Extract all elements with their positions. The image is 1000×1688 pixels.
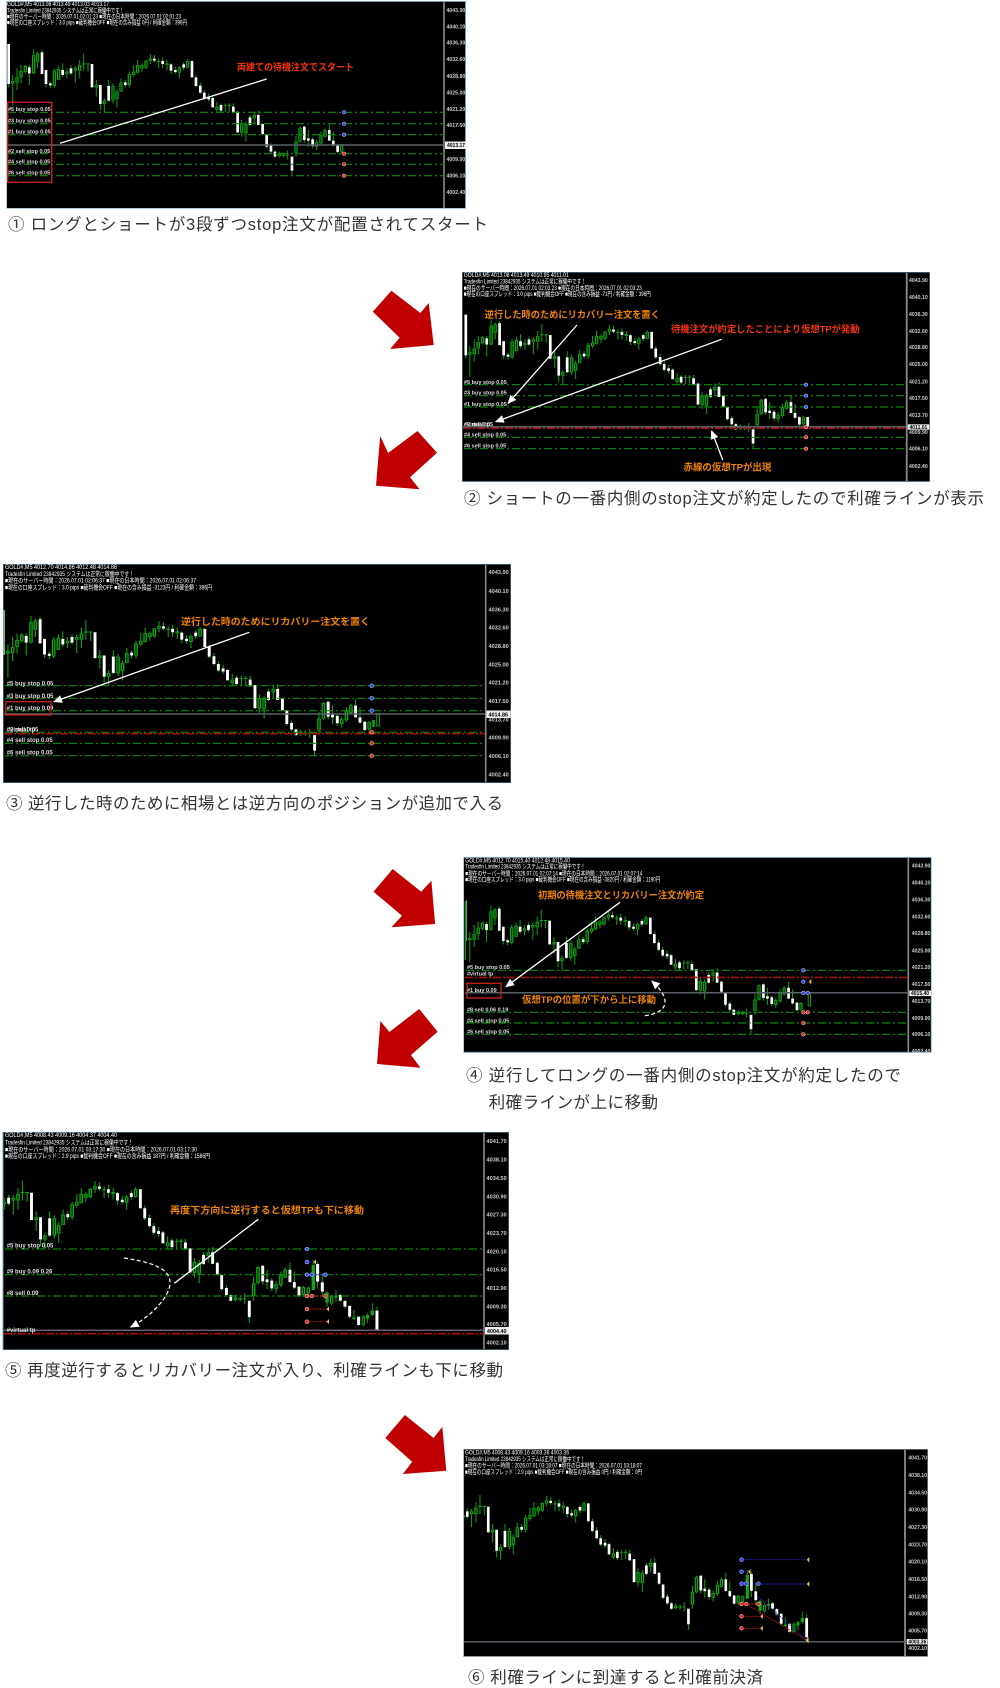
price axis labels (486, 1139, 507, 1347)
price axis labels: 4027.30 (486, 1213, 507, 1219)
arrow: down-left 2 (377, 1009, 438, 1068)
left edge candle (464, 901, 466, 960)
header readout: ■現在の口座スプレッド：3.0 pips ■裁判機会OFF ■現在の含み損益 -3123円 / 利確金額：396円 (5, 582, 212, 592)
price axis line (904, 1450, 906, 1656)
caption 4: ④ 逆行してロングの一番内側のstop注文が約定したので (466, 1066, 901, 1085)
price axis labels: 4017.50 (446, 123, 465, 129)
order labels: #1 buy stop 0.05 (8, 130, 51, 136)
header readout: ■現在の口座スプレッド：2.9 pips ■裁判機会OFF ■現在の含み損益 0円 / 利確金額：0円 (465, 1467, 642, 1476)
panel: chart 6 take profit reached (463, 1449, 928, 1657)
white arrows (496, 325, 723, 460)
price axis labels: 4023.70 (486, 1231, 507, 1237)
header readout (5, 564, 212, 592)
candlesticks (0, 1169, 377, 1331)
price axis labels: 4040.10 (488, 589, 509, 595)
price axis line (485, 565, 487, 782)
price axis labels: 4025.00 (488, 662, 509, 668)
header readout: GOLD#,M5 4008.43 4009.16 4003.36 4003.36 (465, 1450, 569, 1456)
price axis labels: 4038.10 (908, 1473, 927, 1479)
current price tag: 4011.01 (910, 425, 928, 431)
current price tag (445, 142, 466, 149)
header readout: Tradesfin Limited 23842935 システムは正常に稼働中です！ (7, 6, 124, 14)
order lines (4, 686, 485, 756)
price axis labels: 4012.90 (486, 1286, 507, 1292)
header readout: GOLD#,M5 4013.08 4013.49 4010.95 4011.01 (464, 272, 569, 279)
price axis labels: 4028.80 (446, 74, 465, 80)
price axis labels: 4032.60 (446, 57, 465, 63)
price axis labels: 4012.90 (908, 1594, 927, 1600)
chart background (6, 2, 466, 208)
price axis labels: 4032.60 (909, 329, 928, 335)
caption 4 (466, 1066, 901, 1112)
order labels (7, 682, 54, 756)
current price line (464, 1641, 905, 1643)
candlesticks (466, 315, 808, 449)
price axis labels: 4043.90 (912, 864, 931, 870)
order labels: #6 sell stop 0.05 (467, 1030, 509, 1036)
price axis labels: 4028.80 (909, 345, 928, 351)
chart background (462, 272, 930, 482)
header readout: ■現在のサーバー時間：2026.07.01 03:17:30 ■現在の日本時間：2026.07.01 03:17:30 (5, 1144, 197, 1154)
price axis labels: 4002.40 (446, 190, 465, 196)
arrow: down-left 1 (376, 431, 437, 489)
panel: chart 1 initial stop orders (6, 1, 466, 208)
header readout: Tradesfin Limited 23842935 システムは正常に稼働中です！ (5, 569, 134, 578)
price axis labels: 4043.90 (446, 8, 465, 14)
header readout: ■現在の口座スプレッド：3.0 pips ■裁判機会OFF ■現在の含み損益 0円 / 利確金額：396円 (7, 18, 187, 27)
header readout: ■現在のサーバー時間：2026.07.01 02:07:14 ■現在の日本時間：2026.07.01 02:07:14 (465, 868, 643, 877)
current price tag: 4015.40 (911, 991, 929, 997)
order labels (464, 380, 507, 450)
price axis labels: 4040.10 (909, 295, 928, 301)
order labels: #5 buy stop 0.05 (7, 1244, 54, 1250)
price axis labels: 4005.70 (908, 1629, 927, 1635)
header readout: GOLD#,M5 4013.08 4013.49 4013.03 4013.17 (7, 1, 109, 8)
annotations: 仮想TPの位置が下から上に移動 (522, 994, 656, 1006)
price axis labels: 4002.40 (912, 1049, 931, 1055)
price axis labels: 4002.10 (486, 1341, 507, 1347)
header readout: Tradesfin Limited 23842935 システムは正常に稼働中です！ (5, 1138, 133, 1146)
panel: chart 3 recovery order (3, 564, 511, 783)
order labels: #2 sell 0.05 (7, 728, 39, 734)
header readout: GOLD#,M5 4008.43 4009.16 4004.37 4004.40 (5, 1132, 117, 1139)
caption 4: 利確ラインが上に移動 (489, 1093, 658, 1112)
price axis labels: 4041.70 (908, 1456, 927, 1462)
order labels: #2 sell stop 0.05 (8, 149, 50, 155)
panel: chart 4 virtual TP moves up (464, 857, 931, 1055)
left edge candle (3, 610, 5, 655)
order labels: #6 sell stop 0.05 (464, 444, 506, 450)
order labels: #3 buy stop 0.05 (7, 694, 54, 700)
price axis labels: 4017.50 (912, 982, 931, 988)
order labels: #8 sell 0.09 (7, 1291, 39, 1297)
price axis labels: 4028.80 (912, 931, 931, 937)
order labels: #1 buy stop 0.09 (7, 706, 54, 712)
order labels: #9 buy 0.09 0.26 (7, 1270, 53, 1276)
order labels: #3 buy stop 0.05 (464, 391, 507, 397)
annotations: 赤線の仮想TPが出現 (684, 462, 772, 474)
header readout: GOLD#,M5 4012.70 4014.86 4012.48 4014.86 (5, 564, 117, 571)
arrow: down-right 2 (374, 869, 435, 927)
caption 1: ① ロングとショートが3段ずつstop注文が配置されてスタート (8, 215, 488, 234)
dashed curved arrow (124, 1258, 170, 1327)
annotations: 逆行した時のためにリカバリー注文を置く (485, 309, 660, 321)
price axis labels: 4009.90 (909, 430, 928, 436)
header readout: ■現在のサーバー時間：2026.07.01 02:06:37 ■現在の日本時間：2026.07.01 02:06:37 (5, 576, 196, 584)
current price tag (485, 1327, 509, 1335)
price axis labels: 4040.10 (912, 880, 931, 886)
candlesticks (466, 900, 811, 1034)
caption 6: ⑥ 利確ラインに到達すると利確前決済 (468, 1668, 763, 1687)
price axis labels: 4009.90 (446, 157, 465, 163)
price axis line (906, 273, 908, 481)
header readout (464, 272, 651, 298)
annotations (522, 890, 704, 1006)
price axis labels: 4034.50 (908, 1490, 927, 1496)
order labels: #6 sell stop 0.05 (7, 750, 53, 756)
order lines (4, 1249, 484, 1334)
price axis labels: 4016.50 (486, 1268, 507, 1274)
price axis labels: 4025.00 (912, 948, 931, 954)
price axis labels (909, 278, 928, 470)
price axis labels: 4013.70 (912, 999, 931, 1005)
order labels: #2 sell 0.05 (464, 422, 493, 428)
price axis labels: 4038.10 (486, 1158, 507, 1164)
annotation: 再度下方向に逆行すると仮想TPも下に移動 (170, 1204, 364, 1216)
annotations: 待機注文が約定したことにより仮想TPが発動 (671, 324, 860, 336)
price axis line (483, 1133, 485, 1349)
price axis labels: 4002.40 (909, 464, 928, 470)
caption 2: ② ショートの一番内側のstop注文が約定したので利確ラインが表示 (464, 489, 984, 508)
order lines (7, 112, 444, 176)
price axis labels: 4016.50 (908, 1577, 927, 1583)
current price tag: 4003.36 (908, 1640, 927, 1646)
price axis labels: 4006.10 (909, 446, 928, 452)
order labels: #virtual tp (7, 728, 36, 734)
price axis labels: 4036.30 (488, 607, 509, 613)
current price tag: 4004.40 (487, 1329, 506, 1335)
order lines (463, 385, 906, 449)
price axis labels: 4030.90 (486, 1194, 507, 1200)
arrow: down-right 1 (373, 291, 434, 349)
header readout (7, 1, 187, 27)
price axis line (907, 858, 909, 1052)
chart background (464, 1449, 928, 1657)
order labels: #virtual tp (467, 972, 494, 978)
price axis labels: 4013.70 (909, 413, 928, 419)
current price tag (486, 710, 510, 718)
price axis labels (908, 1456, 927, 1652)
price axis labels: 4036.30 (912, 898, 931, 904)
candlesticks (4, 610, 379, 756)
panel: chart 2 virtual TP appears (462, 272, 930, 482)
header readout: Tradesfin Limited 23842935 システムは正常に稼働中です！ (464, 276, 586, 286)
order labels: #4 sell stop 0.05 (8, 160, 50, 166)
price axis labels: 4027.30 (908, 1525, 927, 1531)
price axis labels (446, 8, 465, 196)
chart background (3, 564, 511, 783)
order labels: #1 buy stop 0.05 (464, 402, 507, 408)
order labels: #5 buy stop 0.05 (7, 682, 54, 688)
chart background (3, 1132, 509, 1350)
price axis labels: 4013.70 (488, 717, 509, 723)
header readout: ■現在のサーバー時間：2026.07.01 02:03:23 ■現在の日本時間：2026.07.01 02:03:23 (464, 283, 642, 292)
annotations (485, 309, 860, 474)
price axis labels: 4020.10 (908, 1560, 927, 1566)
chart background (464, 858, 931, 1052)
order labels: #5 buy stop 0.05 (467, 965, 510, 971)
order labels (7, 1244, 54, 1334)
header readout: GOLD#,M5 4012.70 4015.40 4012.48 4015.40 (465, 857, 570, 864)
order labels: #5 buy stop 0.05 (464, 380, 507, 386)
price axis labels: 4023.70 (908, 1542, 927, 1548)
red highlight box (8, 102, 52, 182)
annotation: 両建ての待機注文でスタート (237, 62, 354, 74)
order markers (342, 110, 346, 178)
order labels: #8 sell 0.06 0.19 (467, 1007, 508, 1013)
header readout: ■現在の口座スプレッド：3.0 pips ■裁判機会OFF ■現在の含み損益 -3820円 / 利確金額：1190円 (465, 875, 660, 884)
price axis labels: 4032.60 (912, 914, 931, 920)
price axis labels: 4006.10 (488, 754, 509, 760)
price axis labels: 4009.30 (486, 1304, 507, 1310)
price axis labels: 4002.10 (908, 1646, 927, 1652)
price axis labels: 4006.10 (446, 174, 465, 180)
white arrows (506, 902, 665, 1016)
order markers (802, 968, 811, 1036)
closed position markers (740, 1557, 809, 1644)
price axis labels: 4021.20 (912, 965, 931, 971)
header readout: ■現在のサーバー時間：2026.07.01 02:01:23 ■現在の日本時間：2026.07.01 02:01:23 (7, 12, 181, 20)
order markers (370, 684, 374, 758)
panel: chart 5 second recovery (0, 1132, 509, 1350)
red highlight box (467, 983, 501, 998)
header readout: ■現在の口座スプレッド：3.0 pips ■裁判機会OFF ■現在の含み損益 -71円 / 利確金額：396円 (464, 289, 651, 298)
price axis labels: 4040.10 (446, 24, 465, 30)
order labels: #4 sell stop 0.05 (464, 432, 506, 438)
white arrow line (174, 1219, 258, 1283)
order labels: #3 buy stop 0.05 (8, 118, 51, 124)
header readout: ■現在のサーバー時間：2026.07.01 03:18:07 ■現在の日本時間：2026.07.01 03:18:07 (465, 1460, 642, 1470)
header readout: Tradesfin Limited 23842935 システムは正常に稼働中です！ (465, 862, 585, 871)
order labels (467, 965, 510, 1036)
candlesticks (9, 44, 342, 176)
order labels (8, 107, 51, 176)
price axis labels (912, 864, 931, 1055)
price axis labels: 4036.30 (446, 41, 465, 47)
price axis labels: 4009.30 (908, 1612, 927, 1618)
order labels: #5 buy stop 0.05 (8, 107, 51, 113)
price axis labels: 4021.20 (909, 380, 928, 386)
header readout (465, 1450, 642, 1476)
header readout (465, 857, 660, 884)
order lines (465, 970, 908, 1034)
price axis labels: 4006.10 (912, 1032, 931, 1038)
price axis labels: 4034.50 (486, 1176, 507, 1182)
caption 3: ③ 逆行した時のために相場とは逆方向のポジションが追加で入る (6, 794, 503, 813)
white arrow (54, 632, 249, 702)
header readout: Tradesfin Limited 23842935 システムは正常に稼働中です！ (465, 1454, 585, 1463)
order markers (804, 383, 808, 451)
price axis labels: 4017.50 (909, 396, 928, 402)
annotation: 逆行した時のためにリカバリー注文を置く (181, 616, 370, 628)
price axis labels (488, 570, 509, 778)
price axis labels: 4030.90 (908, 1508, 927, 1514)
candlesticks (464, 1494, 808, 1638)
price axis labels: 4043.90 (909, 278, 928, 284)
price axis labels: 4043.90 (488, 570, 509, 576)
price axis labels: 4021.20 (446, 107, 465, 113)
arrow line to annotation (60, 79, 267, 143)
price axis labels: 4025.00 (909, 362, 928, 368)
price axis labels: 4002.40 (488, 772, 509, 778)
price axis labels: 4021.20 (488, 681, 509, 687)
price axis labels: 4041.70 (486, 1139, 507, 1145)
price axis line (443, 2, 445, 208)
order labels: #virtual tp (7, 1328, 36, 1334)
order labels: #virtual tp (464, 422, 491, 428)
red highlight box (6, 702, 51, 715)
order labels: #4 sell stop 0.05 (467, 1018, 509, 1024)
price axis labels: 4025.00 (446, 90, 465, 96)
price axis labels: 4009.90 (488, 736, 509, 742)
price axis labels: 4032.60 (488, 626, 509, 632)
price axis labels: 4028.80 (488, 644, 509, 650)
current price tag: 4013.17 (447, 143, 465, 149)
price axis labels: 4020.10 (486, 1249, 507, 1255)
caption 5: ⑤ 再度逆行するとリカバリー注文が入り、利確ラインも下に移動 (5, 1361, 503, 1380)
price axis labels: 4009.90 (912, 1016, 931, 1022)
annotations: 初期の待機注文とリカバリー注文が約定 (538, 890, 704, 902)
order labels: #4 sell stop 0.05 (7, 738, 53, 744)
header readout (5, 1132, 210, 1160)
order labels: #1 buy 0.09 (467, 988, 497, 994)
current price tag: 4014.86 (488, 712, 508, 718)
order labels: #6 sell stop 0.05 (8, 170, 50, 176)
header readout: ■現在の口座スプレッド：2.9 pips ■裁判機会OFF ■現在の含み損益 187円 / 利確金額：1586円 (5, 1151, 210, 1160)
arrow: down-right 3 (385, 1415, 446, 1474)
price axis labels: 4005.70 (486, 1322, 507, 1328)
position markers (305, 1247, 329, 1324)
price axis labels: 4017.50 (488, 699, 509, 705)
price axis labels: 4036.30 (909, 312, 928, 318)
